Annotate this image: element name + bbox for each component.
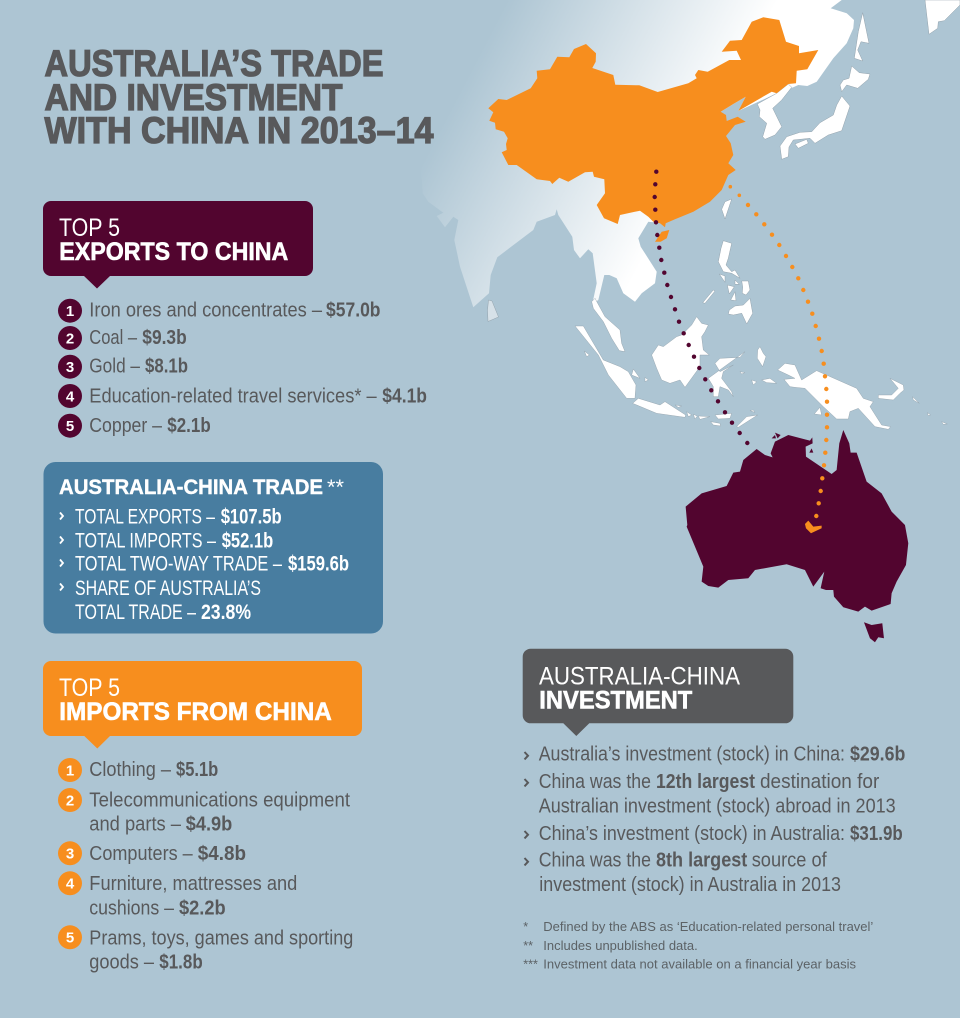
land: Palawan — [703, 290, 715, 303]
Australia's investment in China: $29.6b — [850, 744, 905, 766]
title: AND INVESTMENT — [44, 77, 343, 118]
export 2: coal: Coal – — [89, 327, 138, 349]
land: Sakhalin — [854, 13, 869, 61]
import 2: telecommunications: $4.9b — [186, 814, 232, 836]
panel: Australia-China investment heading — [523, 649, 793, 736]
export 4: education services: $4.1b — [382, 385, 427, 407]
export 5: copper: $2.1b — [167, 415, 211, 437]
land: Maluku islands — [740, 372, 777, 385]
export 1: iron ores: Iron ores and concentrates – — [89, 300, 323, 322]
land: Sumatra — [575, 326, 636, 398]
dotted route: imports from China — [728, 185, 829, 518]
share of total trade: TOTAL TRADE – — [75, 601, 196, 624]
panel: Australia-China trade — [44, 462, 383, 634]
Tasmania — [864, 622, 884, 642]
title — [44, 43, 434, 151]
export 4: education services: Education-related travel services* – — [89, 385, 377, 407]
export 1: iron ores: 1 — [66, 303, 74, 320]
land: Korea — [757, 84, 792, 139]
Australia — [686, 430, 908, 612]
import 4: furniture: cushions – — [89, 897, 175, 919]
land: Java — [633, 398, 686, 417]
import 2: telecommunications — [58, 788, 350, 836]
import 1: clothing: Clothing – — [89, 759, 172, 781]
import 1: clothing: 1 — [66, 762, 74, 779]
share of total trade: 23.8% — [201, 601, 251, 624]
land: small island south of New Guinea — [814, 407, 822, 415]
trade bullet arrows — [60, 512, 63, 590]
China as investment destination: 12th largest — [656, 771, 755, 793]
land: New Britain — [878, 378, 904, 400]
heading box: exports — [43, 201, 313, 288]
land: Solomon islands — [913, 397, 947, 424]
land: Malay Peninsula — [592, 298, 625, 352]
footnotes: Defined by the ABS as ‘Education-related personal travel’ — [543, 920, 873, 934]
footnotes: * — [523, 920, 528, 934]
Hainan — [655, 230, 669, 242]
export 2: coal: $9.3b — [142, 327, 187, 349]
China as investment destination: China was the — [539, 771, 651, 793]
list: top 5 imports — [58, 758, 353, 973]
panel: top 5 imports heading: TOP 5 — [59, 674, 120, 702]
share of total trade: SHARE OF AUSTRALIA’S — [75, 577, 261, 600]
export 5: copper — [58, 414, 211, 438]
export 1: iron ores: $57.0b — [326, 300, 380, 322]
land: Shikoku — [795, 139, 808, 148]
land: Kamchatka edge — [925, 0, 960, 34]
list: top 5 exports — [58, 299, 427, 438]
land: Luzon — [718, 241, 740, 278]
import 3: computers: 3 — [66, 846, 74, 863]
total two-way trade: TOTAL TWO-WAY TRADE – — [75, 553, 282, 576]
import 5: prams and toys: goods – — [89, 951, 155, 973]
China as investment source: China was the — [539, 850, 651, 872]
map: southern region — [575, 298, 947, 642]
heading box: investment — [523, 649, 793, 736]
export 3: gold: $8.1b — [145, 356, 188, 378]
land: small western islands — [584, 351, 648, 382]
China as investment destination: Australian investment (stock) abroad in 2013 — [539, 795, 896, 817]
China as investment destination — [539, 771, 896, 817]
export 4: education services: 4 — [66, 388, 75, 405]
import 4: furniture: 4 — [66, 876, 75, 893]
import 4: furniture — [58, 871, 297, 919]
land: Sri Lanka — [488, 300, 498, 322]
land: Visayas — [727, 280, 739, 301]
land: Borneo — [652, 317, 709, 387]
footnotes: ** — [523, 939, 533, 953]
footnotes — [523, 920, 873, 972]
land: New Guinea — [778, 363, 891, 429]
land: Mindanao — [728, 298, 753, 324]
land: Lesser Sunda islands — [675, 405, 758, 427]
total imports: $52.1b — [222, 529, 273, 552]
panel: top 5 exports heading — [43, 201, 313, 288]
import 1: clothing — [58, 758, 218, 782]
title: WITH CHINA IN 2013–14 — [44, 110, 434, 151]
panel: top 5 imports heading — [43, 661, 362, 748]
total exports: $107.5b — [221, 505, 282, 528]
title: AUSTRALIA’S TRADE — [44, 43, 384, 84]
import 5: prams and toys: Prams, toys, games and sporting — [89, 927, 353, 949]
panel: Australia-China investment heading: AUSTRALIA-CHINA — [539, 662, 740, 690]
import 3: computers: $4.8b — [198, 843, 246, 865]
trade panel heading: ** — [327, 476, 344, 499]
land: Hokkaido — [840, 66, 870, 92]
import 3: computers: Computers – — [89, 843, 193, 865]
China as investment source: source of — [752, 850, 827, 872]
import 4: furniture: $2.2b — [179, 897, 226, 919]
land: Taiwan — [722, 199, 732, 219]
footnotes: Includes unpublished data. — [543, 939, 698, 953]
China as investment source: 8th largest — [656, 850, 748, 872]
northern Australian islands — [772, 433, 813, 453]
China as investment source: investment (stock) in Australia in 2013 — [539, 874, 841, 896]
total two-way trade: $159.6b — [288, 553, 349, 576]
import 2: telecommunications: 2 — [66, 792, 74, 809]
import 4: furniture: Furniture, mattresses and — [89, 873, 297, 895]
export 3: gold: 3 — [66, 359, 74, 376]
share of total trade — [75, 577, 261, 624]
land: Asia mainland — [420, 0, 854, 307]
total exports: TOTAL EXPORTS – — [75, 505, 215, 528]
panel: top 5 imports heading: IMPORTS FROM CHINA — [59, 698, 332, 726]
footnotes: Investment data not available on a financial year basis — [543, 958, 856, 972]
China's investment in Australia: $31.9b — [850, 823, 903, 845]
panel: top 5 exports heading: TOP 5 — [59, 214, 120, 242]
heading box: imports — [43, 661, 362, 748]
Australia's investment in China: Australia’s investment (stock) in China: — [539, 744, 845, 766]
orange marker in Australia — [805, 521, 822, 533]
import 3: computers — [58, 841, 246, 865]
China as investment destination: destination for — [760, 771, 880, 793]
China as investment source — [539, 850, 841, 896]
land: Sulawesi — [708, 352, 745, 397]
panel: Australia-China investment heading: INVESTMENT — [539, 686, 692, 714]
import 5: prams and toys: $1.8b — [159, 951, 203, 973]
land: Mindoro — [719, 274, 725, 282]
list: investment facts — [524, 744, 905, 896]
panel: top 5 exports heading: EXPORTS TO CHINA — [59, 238, 288, 266]
import 5: prams and toys — [58, 925, 353, 973]
export 5: copper: Copper – — [89, 415, 163, 437]
export 5: copper: 5 — [66, 418, 74, 435]
trade panel background — [44, 462, 383, 634]
investment bullet arrows — [524, 752, 528, 865]
map: Asia and Pacific — [420, 0, 960, 642]
trade panel heading: AUSTRALIA-CHINA TRADE — [59, 476, 323, 499]
export 2: coal — [58, 326, 187, 350]
dotted route: exports to China — [652, 170, 750, 445]
footnotes: *** — [523, 958, 538, 972]
map: northern region — [420, 0, 960, 324]
China — [488, 17, 818, 227]
export 3: gold — [58, 355, 188, 379]
export 3: gold: Gold – — [89, 356, 141, 378]
import 5: prams and toys: 5 — [66, 930, 74, 947]
China's investment in Australia: China’s investment (stock) in Australia: — [539, 823, 845, 845]
land: Samar and Leyte — [742, 281, 750, 295]
export 2: coal: 2 — [66, 330, 74, 347]
import 2: telecommunications: and parts – — [89, 814, 182, 836]
land: Honshu and Kyushu — [780, 96, 850, 159]
import 2: telecommunications: Telecommunications equipment — [89, 790, 350, 812]
import 1: clothing: $5.1b — [176, 759, 218, 781]
land: Halmahera — [757, 347, 766, 367]
total imports: TOTAL IMPORTS – — [75, 529, 216, 552]
